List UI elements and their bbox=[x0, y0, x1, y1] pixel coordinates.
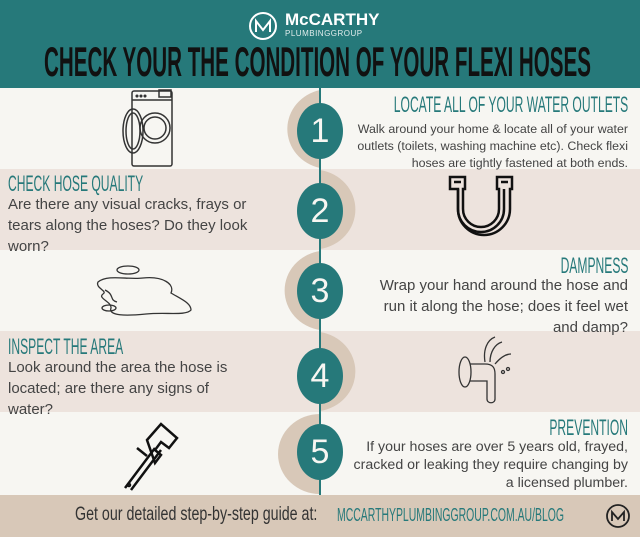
logo: PLUMBINGGROUP bbox=[285, 29, 363, 38]
step 5 text bbox=[354, 439, 628, 491]
text: 2 bbox=[311, 192, 329, 230]
step 1 text: outlets (toilets, washing machine etc). Check flexi bbox=[357, 139, 628, 153]
footer cta: Get our detailed step-by-step guide at: bbox=[75, 504, 317, 525]
row backgrounds bbox=[0, 88, 640, 169]
step 3 text: run it along the hose; does it feel wet bbox=[384, 298, 628, 315]
step 2 text bbox=[8, 196, 248, 255]
step 5 text: cracked or leaking they require changing by bbox=[354, 457, 628, 473]
text: 5 bbox=[311, 433, 329, 471]
step 4 text: Look around the area the hose is bbox=[8, 359, 227, 376]
footer url: MCCARTHYPLUMBINGGROUP.COM.AU/BLOG bbox=[337, 505, 564, 525]
text: 3 bbox=[311, 272, 329, 310]
step 2 text: Are there any visual cracks, frays or bbox=[8, 196, 246, 213]
step numbers bbox=[297, 103, 343, 159]
step 1 text: hoses are tightly fastened at both ends. bbox=[412, 156, 628, 170]
footer bbox=[0, 495, 640, 537]
step 3 text: and damp? bbox=[553, 319, 628, 336]
step 4 text bbox=[8, 359, 227, 418]
text: 4 bbox=[311, 357, 329, 395]
step 3 text bbox=[380, 277, 628, 336]
step 1 heading: LOCATE ALL OF YOUR WATER OUTLETS bbox=[394, 92, 628, 117]
icon: u hose bbox=[448, 176, 514, 236]
step 1 text: Walk around your home & locate all of your water bbox=[358, 122, 628, 136]
icon: washing machine bbox=[122, 89, 173, 167]
step 4 text: water? bbox=[8, 401, 53, 418]
step 5 text: If your hoses are over 5 years old, frayed, bbox=[366, 439, 628, 455]
step 5 text: a licensed plumber. bbox=[506, 475, 628, 491]
footer logo bbox=[606, 504, 630, 528]
logo bbox=[249, 10, 380, 40]
icon: pipe wrench bbox=[124, 422, 179, 491]
icon: puddle bbox=[96, 265, 192, 316]
step 3 heading: DAMPNESS bbox=[560, 253, 628, 278]
step 2 text: tears along the hoses? Do they look bbox=[8, 217, 247, 234]
header band bbox=[0, 0, 640, 88]
icon: leaking tap bbox=[458, 336, 511, 404]
step 2 text: worn? bbox=[8, 238, 49, 255]
step 2 heading: CHECK HOSE QUALITY bbox=[8, 171, 143, 196]
step 4 text: located; are there any signs of bbox=[8, 380, 209, 397]
step 5 heading: PREVENTION bbox=[549, 415, 628, 440]
step 1 text bbox=[357, 122, 628, 170]
step 4 heading: INSPECT THE AREA bbox=[8, 334, 123, 359]
step numbers: 1 bbox=[311, 112, 329, 150]
title: CHECK YOUR THE CONDITION OF YOUR FLEXI HOSES bbox=[44, 38, 591, 85]
logo: McCARTHY bbox=[285, 10, 379, 29]
step 3 text: Wrap your hand around the hose and bbox=[380, 277, 628, 294]
